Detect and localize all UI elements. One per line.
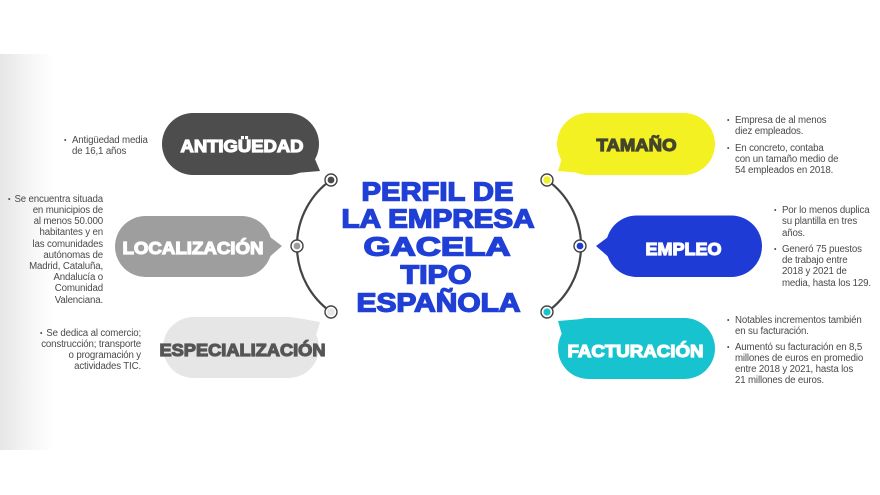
text: especialización: Se dedica al comercio; [46, 328, 141, 339]
text: facturación: • [727, 318, 730, 324]
text: especialización: actividades TIC. [74, 361, 141, 372]
text: localización: Comunidad [55, 283, 103, 294]
bubble: localización [115, 216, 282, 277]
text: localización: • [8, 196, 11, 204]
text: tamaño: • [727, 118, 730, 124]
text: localización: las comunidades [33, 239, 103, 250]
title: ESPAÑOLA [356, 288, 521, 318]
heading: localización: LOCALIZACIÓN [122, 237, 264, 258]
text: especialización: construcción; transporte [41, 339, 141, 350]
heading: facturación: FACTURACIÓN [568, 340, 704, 361]
text: localización: Madrid, Cataluña, [29, 261, 103, 272]
left connector arc with nodes [291, 174, 337, 318]
bubble: empleo [596, 216, 762, 277]
node: localización [291, 240, 303, 252]
text: empleo: Por lo menos duplica [782, 205, 870, 216]
text: empleo: • [774, 208, 777, 214]
text: antigüedad: Antigüedad media [72, 135, 148, 146]
text: empleo: su plantilla en tres [782, 216, 857, 227]
bubble: tamaño [557, 113, 715, 175]
text: empleo: años. [782, 228, 805, 239]
text: empleo [774, 205, 871, 289]
heading: tamaño: TAMAÑO [596, 134, 676, 155]
bubble: especialización [163, 317, 320, 378]
text: facturación: millones de euros en promedio [735, 353, 863, 364]
title [342, 176, 535, 318]
node: facturación [541, 306, 553, 318]
panel: especialización [40, 317, 326, 378]
text: antigüedad [64, 135, 148, 157]
right connector arc with nodes [541, 174, 586, 318]
title: GACELA [364, 232, 511, 262]
text: tamaño: 54 empleados en 2018. [735, 165, 833, 176]
panel: facturación [558, 315, 863, 386]
text: tamaño [727, 115, 838, 176]
text: facturación: en su facturación. [735, 326, 809, 337]
panel: antigüedad [64, 113, 320, 175]
text: localización [8, 194, 104, 306]
text: facturación: Notables incrementos también [735, 315, 862, 326]
node: tamaño [541, 174, 553, 186]
panel: localización [8, 194, 282, 306]
panel: tamaño [557, 113, 838, 176]
heading: antigüedad: ANTIGÜEDAD [180, 136, 304, 156]
text: especialización: o programación y [69, 350, 141, 361]
text: antigüedad: de 16,1 años [72, 146, 127, 157]
text: facturación: • [727, 344, 730, 352]
text: empleo: 2018 y 2021 de [782, 266, 847, 277]
text: empleo: media, hasta los 129. [782, 278, 871, 289]
text: empleo: de trabajo entre [782, 255, 847, 266]
panel: empleo [596, 205, 871, 289]
bubble: facturación [558, 318, 715, 379]
title: LA EMPRESA [342, 204, 535, 234]
text: antigüedad: • [64, 138, 67, 144]
title: TIPO [400, 260, 472, 290]
text: empleo: Generó 75 puestos [782, 244, 862, 255]
text: facturación: entre 2018 y 2021, hasta los [735, 364, 853, 375]
text: facturación: 21 millones de euros. [735, 375, 824, 386]
text: localización: Se encuentra situada [14, 194, 104, 205]
text: tamaño: • [727, 146, 730, 152]
text: especialización [40, 328, 141, 372]
text: localización: al menos 50.000 [34, 216, 104, 227]
text: facturación [727, 315, 863, 386]
text: tamaño: Empresa de al menos [735, 115, 827, 126]
text: tamaño: con un tamaño medio de [735, 154, 838, 165]
text: localización: en municipios de [33, 205, 103, 216]
heading: empleo: EMPLEO [646, 239, 722, 259]
text: tamaño: En concreto, contaba [735, 143, 824, 154]
text: localización: Andalucía o [53, 272, 103, 283]
node: especialización [325, 306, 337, 318]
text: localización: habitantes y en [40, 227, 103, 238]
bubble: antigüedad [162, 113, 320, 175]
text: localización: autónomas de [43, 250, 103, 261]
node: antigüedad [325, 174, 337, 186]
heading: especialización: ESPECIALIZACIÓN [160, 339, 326, 360]
node: empleo [574, 240, 586, 252]
text: facturación: Aumentó su facturación en 8,5 [735, 342, 862, 353]
text: localización: Valenciana. [55, 295, 103, 306]
text: especialización: • [40, 330, 43, 338]
text: tamaño: diez empleados. [735, 126, 803, 137]
text: empleo: • [774, 246, 777, 254]
title: PERFIL DE [362, 176, 514, 206]
